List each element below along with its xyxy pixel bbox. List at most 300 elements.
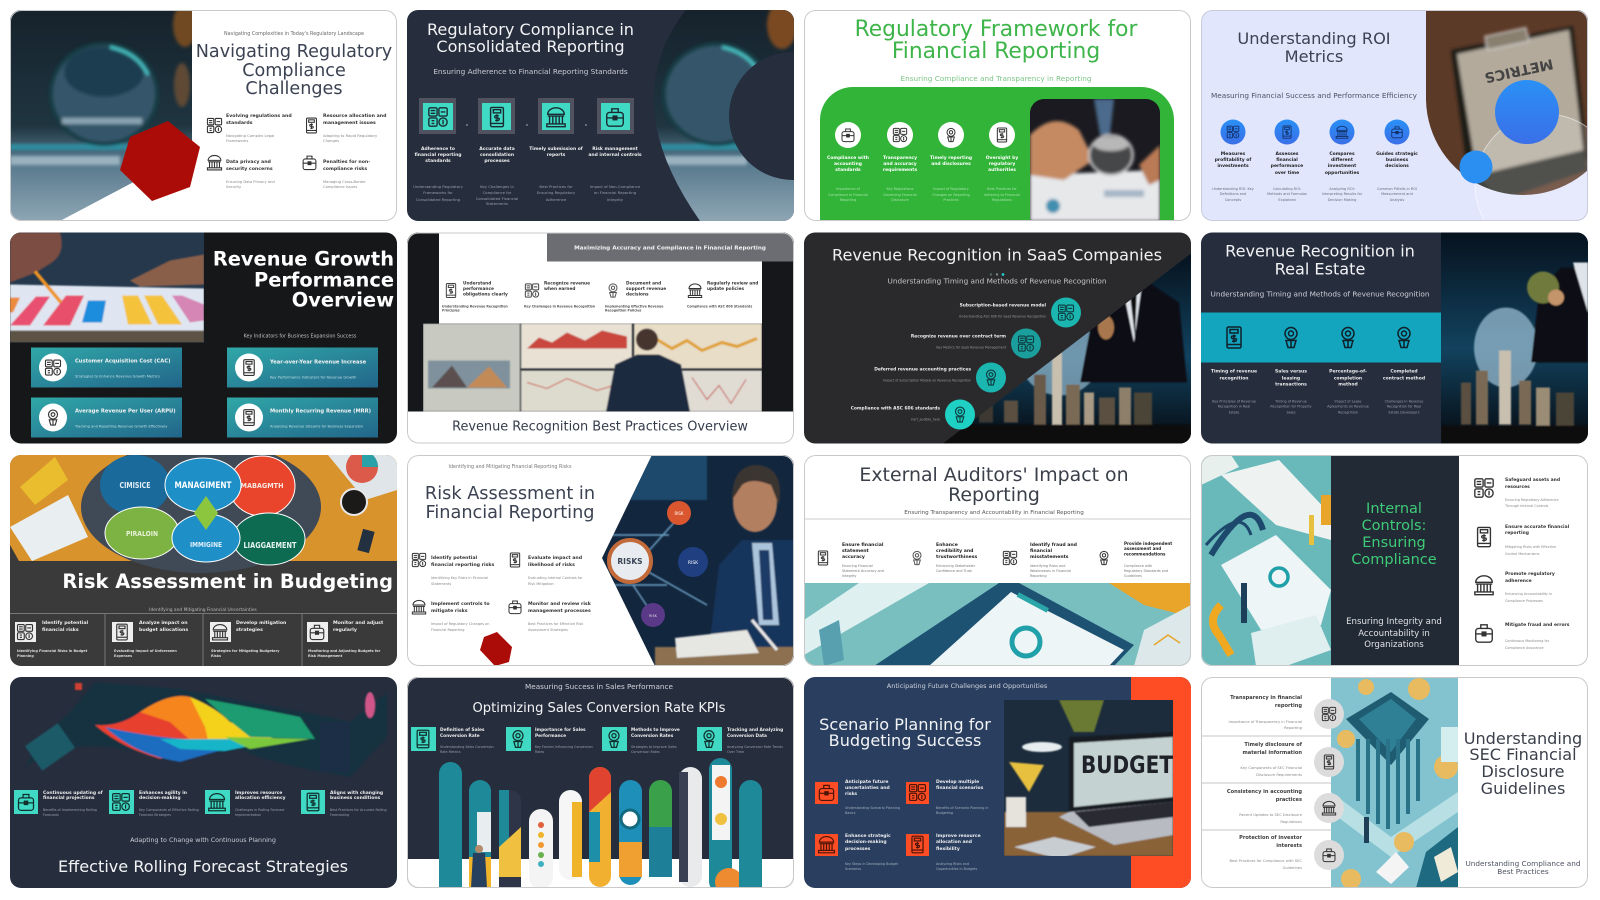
item: improve allocation: Improve resource [936, 833, 981, 839]
item: adherence: Understanding Regulatory [413, 184, 464, 189]
item: transparency: Transparency [883, 155, 917, 161]
title: Challenges [245, 79, 343, 99]
item: recognize when earned: Recognize revenue [544, 280, 590, 286]
item: evaluate impact: Evaluate impact and [528, 555, 582, 561]
item: definition: Definition of Sales [440, 727, 485, 733]
item: timely disclosure: Key Components of SEC Financial [1240, 766, 1302, 770]
subtitle: Ensuring Transparency and Accountability in Financial Reporting [904, 510, 1084, 516]
item: transparency: and accuracy [883, 161, 917, 167]
image: colourful data wave [25, 682, 387, 777]
image: magnifying glass on papers [10, 3, 197, 221]
item: timing: Estate [1229, 410, 1239, 414]
item: evaluate impact: likelihood of risks [528, 562, 575, 568]
item: guides decisions: decisions [1385, 163, 1409, 169]
title: Reporting [948, 484, 1040, 506]
item: transparency: Disclosure [891, 198, 909, 202]
title: Risk Assessment in [425, 484, 595, 504]
item: ASC 606: insrt_audible_here [911, 418, 940, 422]
item: compliance with standards: Importance of [836, 187, 861, 191]
dark circle overlay [729, 52, 794, 180]
item: document decisions: Document and [626, 280, 661, 286]
title: Scenario Planning for [819, 715, 991, 734]
item: risk management: Risk management [592, 146, 639, 152]
item: mitigate fraud: Mitigate fraud and errors [1505, 622, 1570, 628]
item: data privacy: Ensuring Data Privacy and [226, 180, 275, 184]
title: Financial Reporting [425, 503, 595, 523]
item: improve allocation: Analyzing Risks and [936, 862, 969, 866]
item: deferred revenue: Deferred revenue accounting practices [874, 366, 971, 372]
item: timely submission: Best Practices for [539, 184, 573, 189]
subtitle: Ensuring Adherence to Financial Reporting Standards [433, 67, 628, 76]
item: methods: Conversion Rates [631, 733, 674, 739]
title: Real Estate [1275, 260, 1365, 278]
item: agility: Forecast Strategies [139, 813, 171, 817]
item: develop scenarios [906, 779, 988, 815]
image: executive and risk diagram: RISKS [617, 557, 643, 566]
blue circle [1495, 80, 1559, 144]
item: improve allocation: allocation and [936, 839, 972, 845]
item: implement controls: Financial Reporting [431, 628, 464, 632]
title [1351, 501, 1437, 568]
item: accurate data: processes [484, 158, 510, 164]
image: magnifying glass with curved edge [654, 10, 794, 221]
item: sales vs leasing [1270, 328, 1312, 414]
item: safeguard assets: Safeguard assets and [1505, 477, 1560, 483]
small heading: Anticipating Future Challenges and Opportunities [887, 682, 1048, 690]
item: evolving regulations: standards [226, 120, 253, 126]
item: subscription model: Subscription-based revenue model [960, 302, 1046, 308]
item: timing: recognition [1220, 376, 1248, 382]
item: resource allocation: Changes [323, 139, 339, 143]
item: safeguard assets: Ensuring Regulatory Adherence [1505, 498, 1559, 502]
pagination dots [990, 273, 1004, 276]
item: fraud: Weaknesses in Financial [1030, 569, 1071, 573]
item: enhance decisions: Key Steps in Developing Budget [845, 862, 899, 866]
title: External Auditors' Impact on [859, 464, 1129, 486]
item: independent assessment [1100, 541, 1172, 578]
item: guides decisions: Analysis [1390, 198, 1404, 202]
item: measures profitability: Measures [1221, 151, 1246, 157]
item: transparency: Importance of Transparency in Financial [1229, 720, 1302, 724]
item: identify risks: Statements [431, 582, 451, 586]
item: enhance decisions: processes [845, 846, 871, 852]
item: protection [1229, 835, 1344, 870]
item: continuous updating [14, 790, 103, 817]
title [428, 23, 633, 56]
item: evaluate impact: Risk Mitigation [528, 582, 554, 586]
KPI card: CAC: Strategies to Enhance Revenue Growth Metrics [75, 374, 160, 378]
title [213, 248, 394, 312]
item: agility: Enhances agility in [139, 790, 187, 796]
image: executive and risk diagram [597, 455, 794, 666]
item: implement controls: Implement controls to [431, 601, 490, 607]
item: identify risks: financial risks [42, 627, 79, 633]
item: methods: Strategies to Improve Sales [631, 745, 677, 749]
item: risk management [588, 98, 642, 202]
item: monitor regularly: Monitoring and Adjusting Budgets for [308, 649, 381, 653]
image: hands holding magnifier [1030, 99, 1160, 221]
title: Revenue Growth [213, 248, 394, 270]
dark column [1331, 455, 1459, 666]
item: accurate reporting: Ensure accurate financial [1505, 524, 1570, 530]
item: improve allocation: flexibility [936, 846, 960, 852]
item: compares opportunities: Decision Making [1328, 198, 1356, 202]
title: Understanding [1464, 729, 1582, 748]
item: continuous updating: Continuous updating of [43, 790, 103, 796]
item: agility: Key Components of Effective Rolling [139, 808, 199, 812]
item: protection: Guidelines [1283, 866, 1302, 870]
item: evaluate impact: Evaluating Internal Controls for [528, 576, 583, 580]
item: independent assessment: assessment and [1124, 546, 1161, 551]
panel: External Auditors' Impact on Reporting [804, 455, 1191, 666]
item: mitigation strategies: Strategies for Mitigating Budgetary [211, 649, 280, 653]
item: protection: interests [1276, 843, 1302, 849]
title: Financial Reporting [892, 39, 1100, 64]
subtitle: Identifying and Mitigating Financial Uncertainties [149, 607, 258, 613]
item: timely submission: reports [547, 152, 566, 158]
item: resource efficiency: Improves resource [235, 790, 282, 796]
KPI card: ARPU [31, 398, 182, 438]
item: mitigate fraud: Compliance Assurance [1505, 646, 1544, 650]
KPI card: ARPU: Tracking and Reporting Revenue Growth Effectively [74, 424, 168, 428]
title: SEC Financial [1469, 745, 1577, 764]
item: develop scenarios: Benefits of Scenario Planning in [936, 806, 988, 810]
item: understand obligations: Principles [442, 308, 460, 312]
item: safeguard assets [1475, 477, 1560, 508]
item: timely disclosure: material information [1242, 750, 1302, 756]
title: Regulatory Compliance in [427, 20, 634, 39]
item: monitor and review: Best Practices for Effective Risk [528, 622, 584, 626]
panel: Revenue Growth Performance Overview [10, 232, 397, 444]
item: accurate data: Accurate data [479, 146, 515, 152]
subtitle [1346, 617, 1442, 650]
item: deferred revenue [874, 362, 1006, 392]
item: resource efficiency: Challenges in Rolling Forecast [235, 808, 285, 812]
item: data privacy: Data privacy and [226, 159, 271, 165]
divider [804, 518, 1191, 520]
item: anticipate: Basics [845, 811, 856, 815]
item: statement accuracy: Statement Accuracy and [842, 569, 884, 573]
item: resource efficiency: Implementation [235, 813, 261, 817]
item: sales vs leasing: Sales [1286, 410, 1296, 414]
item: definition [411, 727, 494, 754]
item: understand obligations: obligations clearly [463, 292, 508, 298]
item: recognize when earned [524, 280, 596, 308]
item: percentage of completion: Percentage-of- [1329, 368, 1367, 374]
item: compares opportunities: opportunities [1325, 170, 1360, 176]
item: consistency: Consistency in accounting [1227, 789, 1302, 795]
item: implement controls: mitigate risks [431, 608, 468, 614]
connector dots [466, 124, 587, 126]
image: isometric documents and figures [1201, 455, 1331, 666]
panel: Revenue Recognition in SaaS Companies [804, 232, 1191, 444]
item: adherence: Consolidated Reporting [416, 197, 461, 202]
item: timely reporting [930, 122, 972, 202]
subtitle [1465, 859, 1581, 876]
panel: Regulatory Framework for Financial Reporting [804, 10, 1191, 221]
item: assesses performance [1267, 120, 1307, 202]
title: Disclosure [1481, 762, 1565, 781]
title: Performance [254, 268, 394, 292]
item: ASC 606 [851, 400, 975, 430]
item: regulatory adherence: Promote regulatory [1505, 571, 1555, 577]
item: oversight: regulatory [989, 161, 1015, 167]
item: develop scenarios: Develop multiple [936, 779, 979, 785]
item: timing: Timing of revenue [1211, 368, 1257, 374]
image: businessman with plant and city [1441, 232, 1588, 444]
item: assesses performance: financial [1276, 157, 1298, 163]
subtitle: Understanding Timing and Methods of Revenue Recognition [1210, 290, 1430, 298]
item: resource allocation [307, 113, 386, 143]
item: mitigation strategies: strategies [236, 627, 263, 633]
item: compares opportunities: different [1331, 157, 1354, 163]
item: identify risks: Identifying Key Risks in Financial [431, 576, 488, 580]
item: data privacy [207, 155, 275, 189]
item: compliance with standards: Compliance with [827, 155, 869, 161]
orange strip [1131, 677, 1191, 888]
item: sales vs leasing: transactions [1275, 382, 1307, 388]
image: executive and risk diagram: RISK [649, 614, 658, 618]
item: consistency [1227, 789, 1344, 824]
item: adherence: standards [425, 158, 451, 164]
item: monitor and review: management processes [528, 608, 591, 614]
item: aligns with conditions [301, 790, 387, 817]
item: statement accuracy: Integrity [842, 574, 856, 578]
item: timely disclosure: Disclosure Requirements [1256, 773, 1302, 777]
item: identify risks: financial reporting risks [431, 562, 494, 568]
bottom title: Revenue Recognition Best Practices Overview [452, 420, 748, 434]
image: isometric documents and tablet [804, 583, 1191, 666]
red hexagon [480, 632, 512, 666]
image: metrics clipboard: METRICS [1483, 55, 1554, 85]
subtitle: Understanding Timing and Methods of Revenue Recognition [887, 276, 1107, 286]
title: Ensuring [1362, 535, 1426, 551]
item: methods [602, 727, 680, 754]
item: accurate data [476, 98, 518, 206]
item: timely reporting: Changes on Reporting [932, 193, 970, 197]
item: continuous updating: financial projections [43, 795, 95, 801]
item: fraud: Identify fraud and [1030, 542, 1077, 548]
item: mitigation strategies [210, 620, 286, 658]
item: compliance with standards: accounting [834, 161, 862, 167]
small heading: Navigating Complexities in Today's Regulatory Landscape [224, 31, 364, 37]
KPI card: CAC: Customer Acquisition Cost (CAC) [75, 358, 170, 364]
title [1238, 32, 1389, 62]
item: consistency: practices [1276, 797, 1302, 803]
item: anticipate [815, 779, 900, 815]
item: document decisions: support revenue [626, 286, 666, 292]
item: compares opportunities: Interpreting Results for [1322, 192, 1363, 196]
title: Risk Assessment in Budgeting [62, 570, 393, 593]
image: hand with pencil and bar chart [10, 232, 204, 342]
item: identify risks: Identifying Financial Risks in Budget [17, 649, 88, 653]
panel: Understanding ROI Metrics [1201, 10, 1588, 221]
item: timely reporting: Timely reporting [930, 155, 972, 161]
item: agility: decision-making [139, 795, 181, 801]
item: compares opportunities: investment [1328, 163, 1357, 169]
image: analyst facing dashboards [423, 324, 762, 412]
panel: Scenario Planning for Budgeting Success [804, 677, 1191, 888]
item: evolving regulations [207, 113, 292, 143]
row dividers [1201, 736, 1331, 830]
red hexagon [120, 121, 200, 201]
item: timely reporting: Practices [943, 198, 959, 202]
item: accurate data: Compliance for [483, 190, 512, 195]
title: Effective Rolling Forecast Strategies [58, 857, 348, 876]
panel: Revenue Recognition Best Practices Overview [407, 232, 794, 444]
item: anticipate: Understanding Scenario Planning [845, 806, 900, 810]
item: oversight [984, 122, 1020, 202]
item: completed contract: Recognition for Real [1387, 404, 1421, 408]
item: enhance decisions [815, 833, 899, 871]
column dividers [10, 613, 397, 666]
item: compares opportunities: Analyzing ROI: [1329, 187, 1355, 191]
item: credibility: Confidence and Trust [936, 569, 972, 573]
item: assesses performance: Assesses [1276, 151, 1299, 157]
subtitle: Accountability in [1358, 629, 1430, 639]
title [1225, 242, 1415, 278]
item: anticipate: uncertainties and [845, 785, 890, 791]
item: analyze impact: budget allocations [139, 627, 188, 633]
KPI card: year over year: Year-over-Year Revenue Increase [269, 360, 367, 366]
item: compliance with standards: Compliance in Financial [828, 193, 868, 197]
item: analyze impact: Expenses [114, 654, 132, 658]
item: understand obligations: Understand [463, 280, 491, 286]
item: compliance with standards: Reporting [840, 198, 856, 202]
item: accurate data: Key Challenges in [480, 184, 514, 189]
item: sales vs leasing: leasing [1282, 376, 1300, 382]
item: penalties [303, 156, 370, 189]
item: independent assessment: Compliance with [1124, 564, 1152, 568]
subtitle: Organizations [1364, 640, 1424, 650]
item: timely submission: Timely submission of [529, 146, 583, 152]
image: desk with overlapping circles [10, 441, 397, 573]
item: analyze impact: Evaluating Impact of Unforeseen [114, 649, 177, 653]
item: completed contract: Completed [1390, 368, 1418, 374]
item: measures profitability: Concepts [1225, 198, 1241, 202]
item: protection: Best Practices for Compliance with SEC [1229, 859, 1302, 863]
item: regulatory adherence: Enhancing Accountability in [1505, 592, 1552, 596]
teal band [1201, 312, 1441, 362]
item: compares opportunities [1322, 120, 1363, 202]
gray heading band: Maximizing Accuracy and Compliance in Financial Reporting [574, 246, 766, 252]
item: timely submission [529, 98, 583, 202]
item: completed contract: Estate Developers [1388, 410, 1420, 414]
item: oversight: authorities [988, 167, 1016, 173]
item: implement controls: Impact of Regulatory Changes on [431, 622, 490, 626]
image: desk with overlapping circles: CIMISICE [120, 481, 150, 490]
title: Compliance [242, 61, 346, 81]
subtitle: Key Indicators for Business Expansion Success [244, 334, 357, 340]
item: continuous updating: Forecasts [43, 813, 59, 817]
title: Budgeting Success [829, 731, 981, 750]
title [855, 17, 1137, 64]
item: transparency: Transparency in financial [1230, 695, 1302, 701]
item: identify risks: Planning [17, 654, 34, 658]
item: identify risks [412, 553, 494, 586]
item: guides decisions: Guides strategic [1376, 151, 1418, 157]
KPI card: year over year: Key Performance Indicators for Revenue Growth [270, 376, 356, 380]
image: desk with overlapping circles: LIAGGAEMENT [244, 541, 297, 550]
KPI card: year over year [227, 348, 378, 388]
title [196, 42, 392, 99]
item: guides decisions: business [1386, 157, 1408, 163]
title: Regulatory Framework for [855, 17, 1137, 42]
item: identify risks: Identify potential [431, 555, 478, 561]
item: statement accuracy: statement [842, 548, 870, 554]
item: consistency: Regulations [1280, 820, 1302, 824]
item: evolving regulations: Frameworks [226, 139, 248, 143]
item: definition: Understanding Sales Conversion [440, 745, 494, 749]
translucent large circle [1474, 114, 1587, 220]
gray heading band [547, 232, 794, 262]
subtitle: Ensuring Compliance and Transparency in Reporting [900, 74, 1092, 83]
item: credibility: Enhancing Stakeholder [936, 564, 976, 568]
title: Overview [292, 288, 394, 312]
small blue circle [1460, 150, 1492, 184]
item: consistency: Recent Updates to SEC Disclosure [1239, 813, 1303, 817]
title: Understanding ROI [1237, 29, 1391, 48]
item: importance: Importance for Sales [535, 727, 586, 733]
green panel [820, 87, 1174, 221]
item: evolving regulations: Navigating Complex Legal [226, 134, 274, 138]
item: transparency: Governing Financial [883, 193, 917, 197]
item: credibility: Enhance [936, 542, 958, 548]
item: review policies [687, 280, 758, 308]
item: transparency: reporting [1275, 703, 1302, 709]
item: fraud: Identifying Risks and [1030, 564, 1065, 568]
image: businessman and coin city [934, 252, 1191, 444]
item: risk management: Impact of Non-Compliance [590, 184, 641, 189]
item: risk management: Integrity [607, 197, 624, 202]
item: enhance decisions: decision-making [845, 839, 887, 845]
item: sales vs leasing: Timing of Revenue [1274, 400, 1307, 404]
image: illustrated pill columns [407, 758, 794, 900]
item: percentage of completion: method [1338, 382, 1358, 388]
item: review policies: update policies [707, 286, 744, 292]
item: timely disclosure [1240, 742, 1344, 777]
item: enhance decisions: Enhance strategic [845, 833, 891, 839]
title: Guidelines [1481, 779, 1565, 798]
item: identify risks [15, 620, 89, 658]
item: subscription model [959, 298, 1081, 328]
item: monitor and review: Assessment Strategies [528, 628, 568, 632]
item: ASC 606: Compliance with ASC 606 standards [851, 406, 940, 412]
item: accurate data: Statements [486, 201, 508, 206]
item: contract term: Key Metrics for SaaS Revenue Management [936, 346, 1007, 350]
item: definition: Conversion Rate [440, 733, 480, 739]
item: importance: Rates [535, 750, 545, 754]
item: definition: Rate Metrics [440, 750, 461, 754]
item: percentage of completion: Agreements on Revenue [1327, 404, 1369, 408]
item: evolving regulations: Evolving regulations and [226, 113, 292, 119]
item: credibility: credibility and [936, 548, 973, 554]
item: resource allocation: Resource allocation and [323, 113, 386, 119]
KPI card: CAC [31, 348, 182, 388]
image: metrics clipboard [1426, 10, 1588, 195]
item: measures profitability [1212, 120, 1254, 202]
item: assesses performance: performance [1271, 163, 1303, 169]
item: penalties: Penalties for non- [323, 159, 370, 165]
item: resource efficiency: allocation efficiency [235, 795, 286, 801]
item: develop scenarios: Budgeting [936, 811, 953, 815]
item: timing: Key Principles of Revenue [1212, 400, 1256, 404]
item: safeguard assets: resources [1505, 484, 1530, 490]
item: document decisions: Recognition Policies [605, 308, 641, 312]
title: Internal [1366, 501, 1422, 517]
image: executive and risk diagram: RISK [674, 511, 684, 516]
item: independent assessment: Provide independent [1124, 541, 1172, 546]
